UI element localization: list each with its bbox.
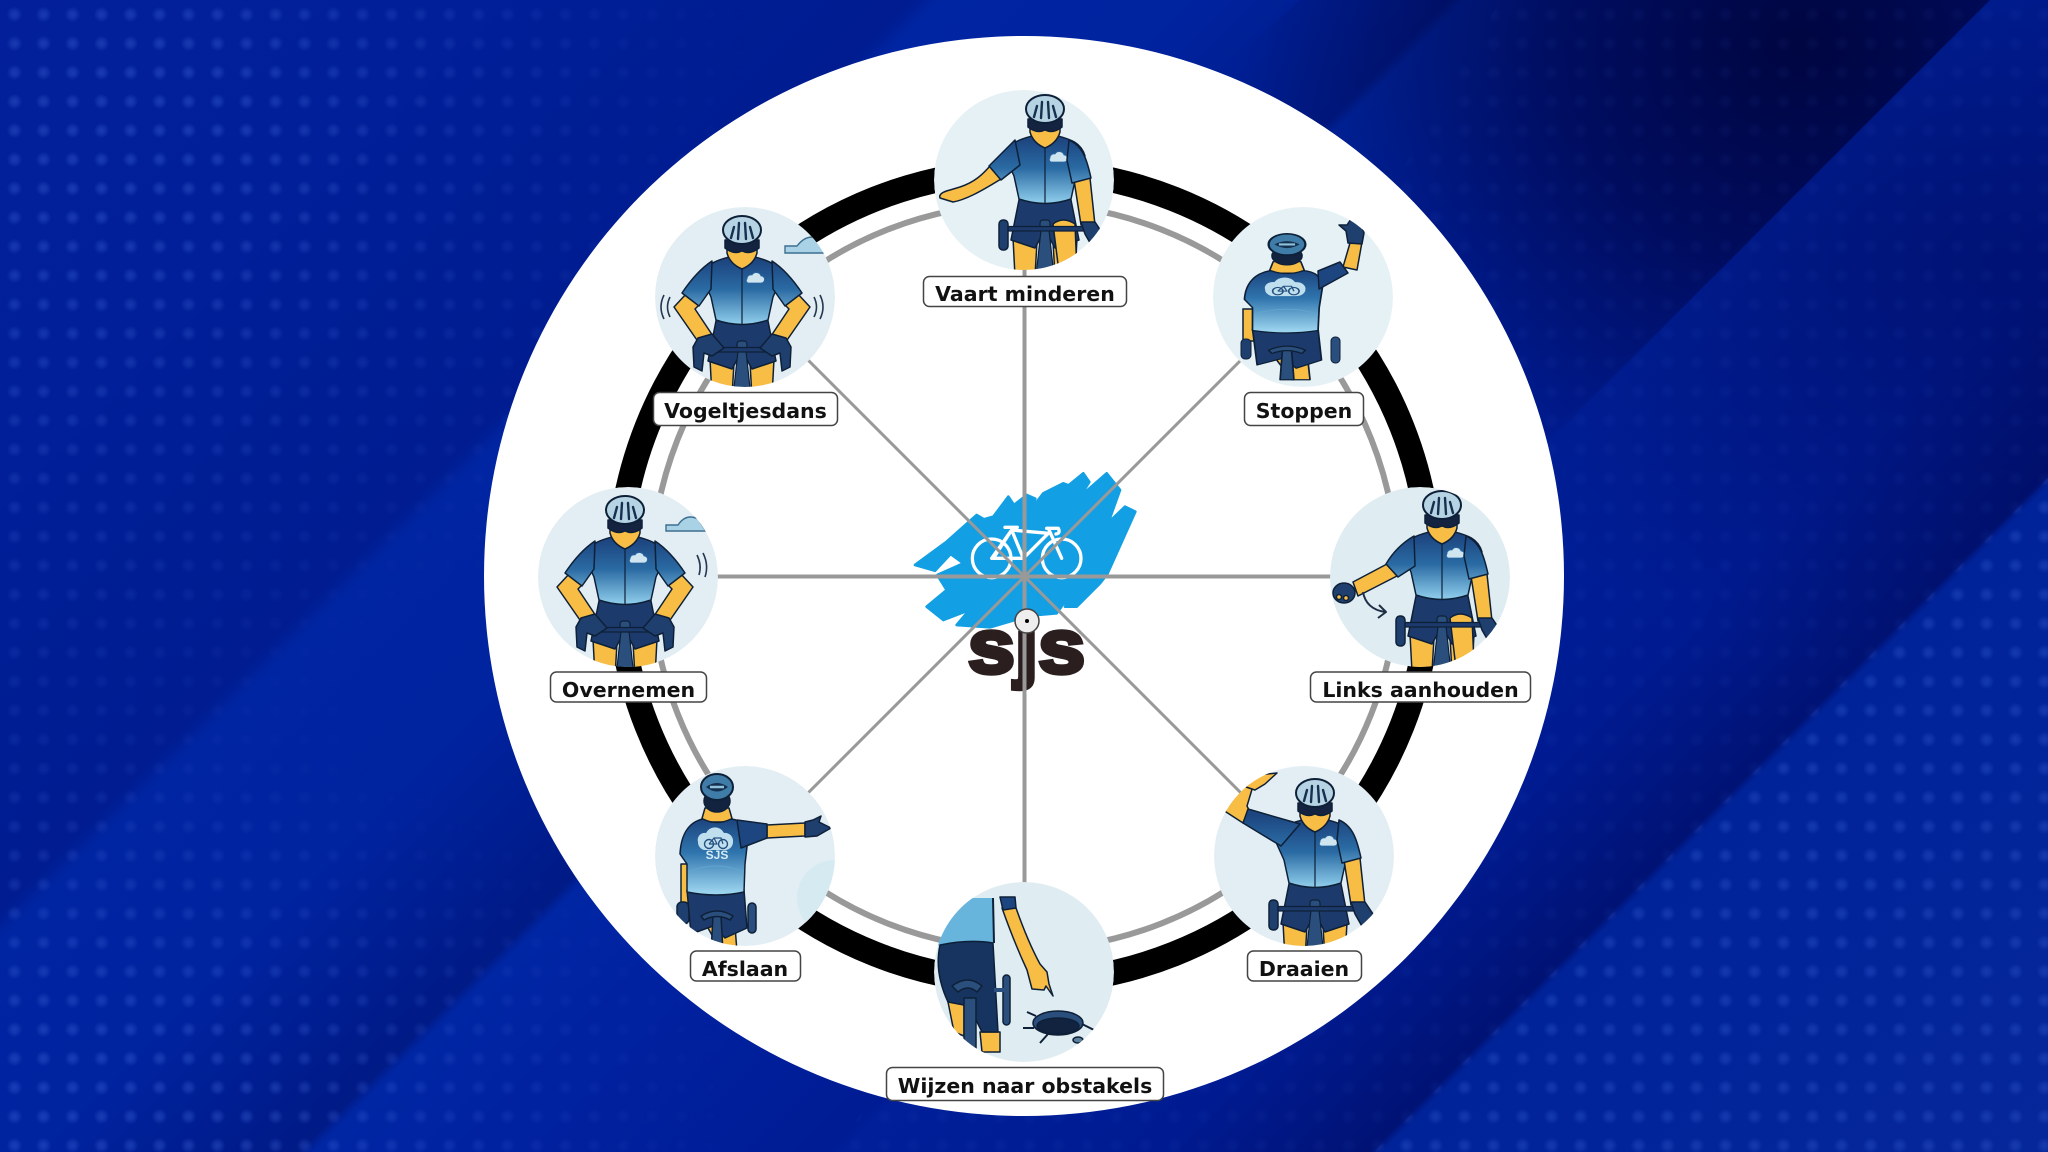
wheel rim ring [652,204,1398,950]
label: Wijzen naar obstakels: Wijzen naar obstakels [898,1074,1152,1098]
label: Wijzen naar obstakels [886,1068,1164,1100]
background: shaded right band [1588,0,2048,534]
cyclist photo: Wijzen naar obstakels [932,882,1114,1062]
wheel hub [1015,609,1039,633]
label: Afslaan: Afslaan [702,957,788,981]
wheel tyre ring [618,170,1430,982]
cyclist photo: Vaart minderen [934,90,1114,276]
label: Links aanhouden: Links aanhouden [1322,678,1519,702]
label: Stoppen [1244,392,1364,426]
label: Vaart minderen: Vaart minderen [935,282,1115,306]
label: Vogeltjesdans [654,392,838,426]
label: Afslaan [690,951,800,981]
label: Vogeltjesdans: Vogeltjesdans [664,399,827,423]
label: Draaien [1248,951,1362,981]
cyclist photo: Overnemen [538,487,718,677]
label: Overnemen [550,672,706,702]
labels [550,276,1530,1100]
label: Stoppen: Stoppen [1256,399,1352,423]
background: faint halftone dots upper right [1609,12,1958,218]
cyclist photo: Afslaan: SJS [706,848,728,862]
cyclist photo: Links aanhouden [1330,487,1510,672]
label: Draaien: Draaien [1259,957,1349,981]
cyclist photo: Afslaan [655,766,835,946]
center logo: SJS [915,473,1135,690]
background: halftone dots lower right [1376,478,2048,1152]
white wheel disc [484,36,1564,1116]
wheel spokes [628,180,1420,972]
background: dark upper right band [1285,0,1990,432]
logo blue brush mark [915,473,1135,627]
logo wordmark: sjs [968,605,1085,690]
cyclist photo: Draaien [1214,766,1394,960]
infographic wheel [484,36,1564,1116]
cyclist photo: Stoppen [1213,207,1393,387]
label: Overnemen: Overnemen [562,678,695,702]
background: halftone dots left [8,8,567,1152]
logo white bicycle [972,527,1081,578]
cyclist photo: Vogeltjesdans [655,207,835,397]
